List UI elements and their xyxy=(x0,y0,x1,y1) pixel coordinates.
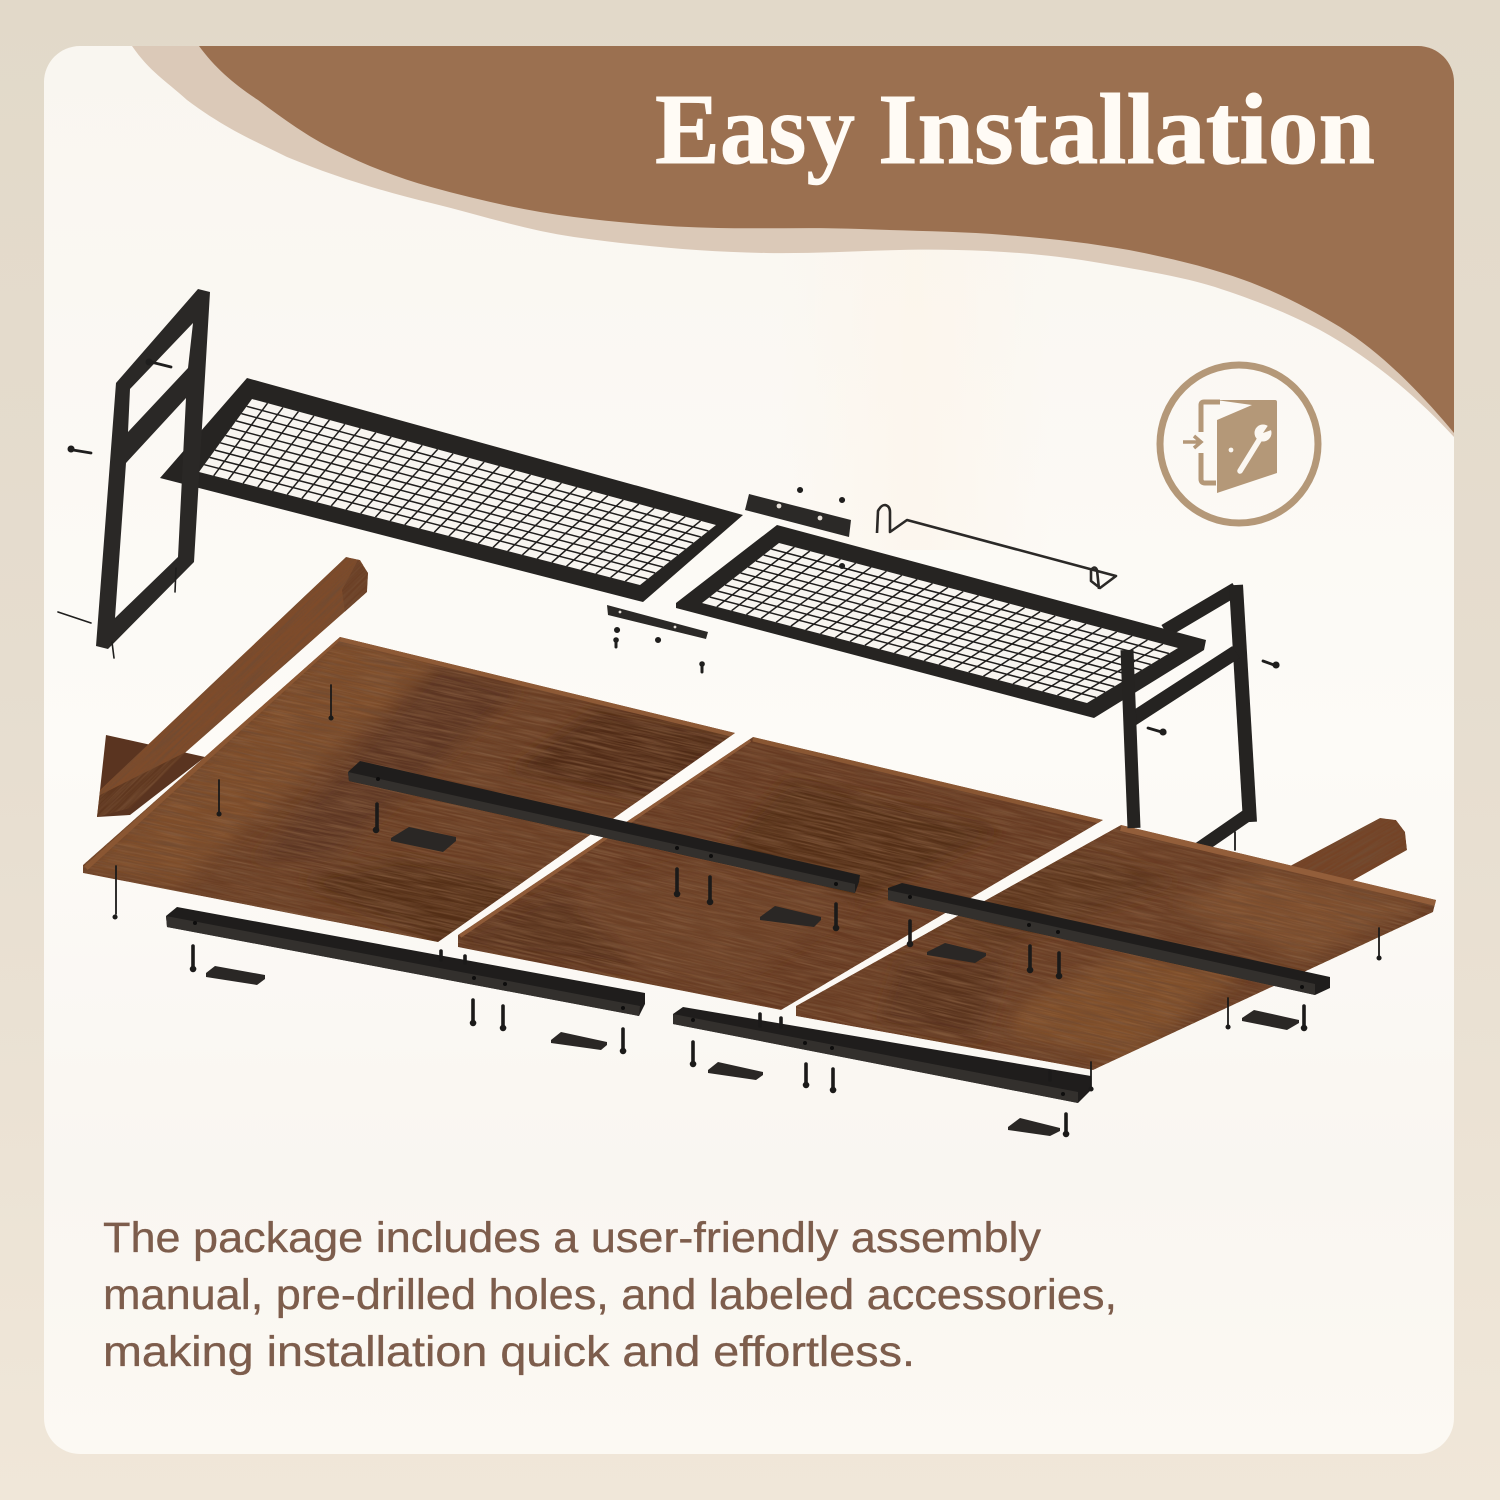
body text: making installation quick and effortless. xyxy=(103,1328,915,1376)
screws: thick xyxy=(193,804,1304,1134)
middle wood board xyxy=(458,737,1103,1010)
title: Installation xyxy=(878,73,1375,185)
top connector bracket xyxy=(745,494,851,537)
right wire mesh shelf xyxy=(676,525,1206,718)
hanging rod xyxy=(877,505,1116,589)
body text: manual, pre-drilled holes, and labeled accessories, xyxy=(103,1271,1117,1319)
header swoosh: brown layer xyxy=(199,46,1454,433)
right upright frame (rear bars) xyxy=(1165,585,1252,850)
body text xyxy=(103,1214,1117,1376)
header swoosh: tan layer xyxy=(132,46,1454,437)
left upright frame xyxy=(96,289,210,649)
left wire mesh shelf xyxy=(160,378,743,602)
body text: The package includes a user-friendly assembly xyxy=(103,1214,1042,1262)
right wood board xyxy=(796,825,1436,1070)
right wooden back support xyxy=(1291,818,1407,880)
lower connector bracket xyxy=(607,605,708,639)
icon: door with wrench xyxy=(1160,365,1318,523)
screws: long thin xyxy=(115,685,1379,1089)
title: Easy xyxy=(655,73,855,185)
left wooden back support xyxy=(97,557,368,817)
screws: loose frame and bracket fixings xyxy=(58,362,1276,733)
left wood board xyxy=(83,637,735,942)
rail: center xyxy=(348,761,860,893)
rail: bottom xyxy=(673,1007,1091,1103)
title xyxy=(655,73,1375,185)
spacer pads xyxy=(206,827,1299,1136)
rail: lower left xyxy=(166,907,645,1016)
rail: right xyxy=(888,883,1330,995)
right upright frame (front bars) xyxy=(1127,650,1236,828)
